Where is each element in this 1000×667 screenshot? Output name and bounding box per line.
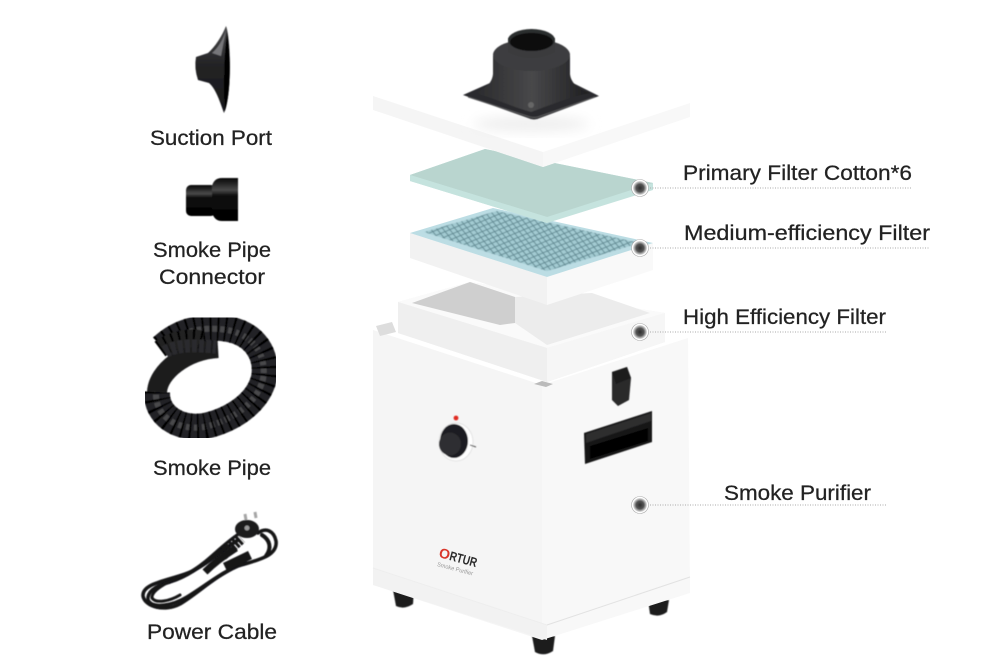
- label: Smoke Pipe Connector: Connector: [159, 266, 265, 289]
- icon: dial knob with indicator: [439, 416, 476, 461]
- layer: high efficiency filter tray: [376, 282, 665, 382]
- layer: top plate with black port: [373, 29, 690, 167]
- body: cabinet faces: [373, 330, 690, 640]
- callout: Smoke Purifier: Smoke Purifier: [724, 482, 871, 505]
- icon: rubber feet: [393, 590, 669, 654]
- accessory: smoke pipe connector: [186, 178, 238, 221]
- icon: latch: [612, 367, 631, 406]
- label: Smoke Pipe: Smoke Pipe: [153, 457, 271, 480]
- callout: Primary Filter Cotton*6: [632, 162, 912, 196]
- label: Suction Port: Suction Port: [150, 127, 272, 150]
- label: Smoke Pipe Connector: [153, 239, 271, 289]
- label: Smoke Pipe Connector: Smoke Pipe: [153, 239, 271, 262]
- layer: primary filter cotton: [410, 149, 653, 223]
- purifier body with dial, handle and branding: [373, 330, 690, 654]
- accessory: coiled smoke pipe: [156, 328, 265, 428]
- logo: ORTUR Smoke Purifier: Smoke Purifier: [436, 562, 474, 577]
- label: Power Cable: Power Cable: [147, 621, 277, 644]
- icon: handle recess: [584, 411, 652, 464]
- callout: Primary Filter Cotton*6: Primary Filter Cotton*6: [683, 162, 912, 185]
- callout: High Efficiency Filter: High Efficiency Filter: [683, 306, 886, 329]
- layer: medium-efficiency filter: [410, 208, 653, 305]
- callout: Medium-efficiency Filter: [632, 222, 930, 256]
- accessory: suction port: [195, 26, 230, 113]
- icon: black duct flange: [463, 29, 599, 120]
- logo: ORTUR Smoke Purifier: O: [437, 544, 452, 563]
- callout: Smoke Purifier: [632, 482, 886, 514]
- logo: ORTUR Smoke Purifier: RTUR: [448, 548, 479, 570]
- callout: High Efficiency Filter: [632, 306, 886, 340]
- logo: ORTUR Smoke Purifier: [435, 544, 480, 578]
- accessory: power cable: [143, 512, 276, 608]
- callout: Medium-efficiency Filter: Medium-efficiency Filter: [684, 222, 930, 245]
